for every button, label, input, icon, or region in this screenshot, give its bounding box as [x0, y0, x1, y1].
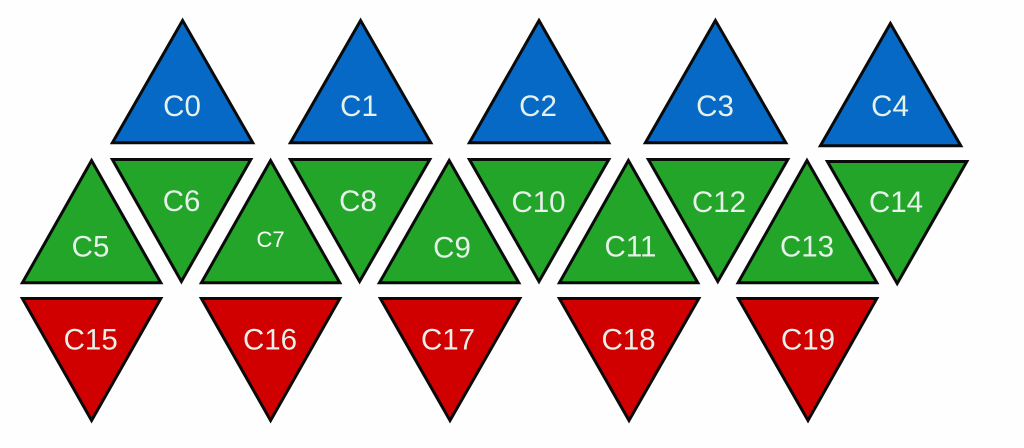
tile: C3: C3 [696, 90, 734, 123]
tile: C7: C7 [256, 227, 285, 252]
tile: C8 [290, 160, 430, 282]
tile: C14: C14 [869, 186, 923, 219]
tile: C18 [559, 298, 699, 420]
tile: C10: C10 [511, 186, 566, 219]
tile: C17 [380, 298, 520, 420]
tile: C7 [201, 160, 340, 283]
tile: C1 [290, 20, 431, 143]
tile: C13: C13 [780, 230, 834, 264]
tile: C17: C17 [421, 324, 475, 356]
tile: C11: C11 [605, 230, 656, 264]
tile: C14 [827, 162, 967, 284]
tile: C8: C8 [339, 185, 377, 218]
tile: C11 [559, 160, 698, 283]
tile: C4 [820, 24, 961, 146]
tile: C12: C12 [692, 186, 746, 219]
tile: C6 [112, 160, 251, 282]
tile: C0 [112, 20, 253, 143]
tile: C10 [469, 160, 609, 282]
tile: C9 [379, 160, 519, 283]
tile: C18: C18 [601, 324, 656, 356]
tile: C16 [201, 298, 340, 420]
tile: C19: C19 [781, 324, 835, 356]
tile: C13 [738, 160, 877, 283]
tile: C2: C2 [519, 90, 557, 123]
tile: C15 [22, 298, 161, 420]
tile: C6: C6 [163, 185, 200, 218]
tile: C5 [22, 160, 161, 283]
tile: C16: C16 [243, 324, 297, 356]
tile: C4: C4 [871, 90, 909, 123]
tile: C0: C0 [163, 90, 201, 123]
tile: C1: C1 [340, 90, 378, 123]
tile: C5: C5 [72, 230, 109, 264]
tile: C19 [738, 298, 877, 420]
tile: C9: C9 [433, 232, 471, 264]
tile: C12 [648, 160, 788, 282]
tile: C3 [645, 20, 786, 143]
tile: C2 [469, 20, 609, 143]
tile: C15: C15 [64, 324, 118, 356]
